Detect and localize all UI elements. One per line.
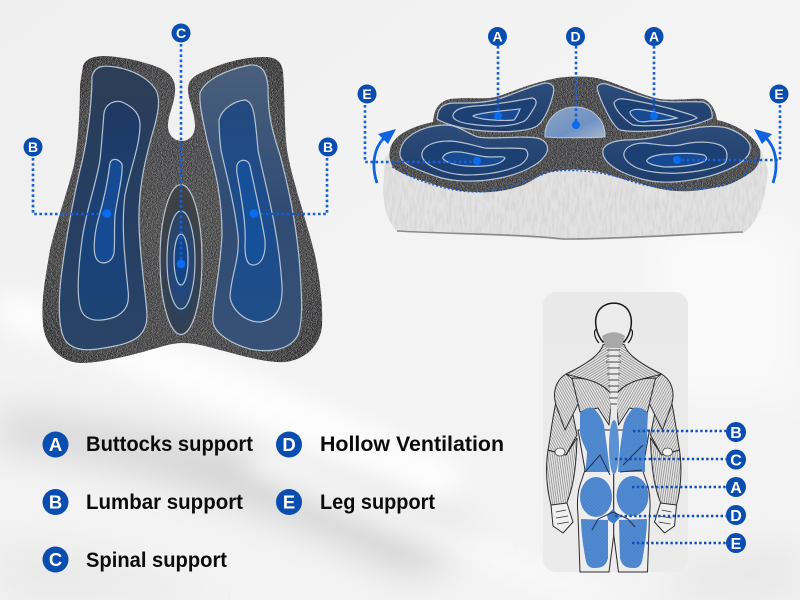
legend: E Leg support: Leg support bbox=[320, 491, 435, 514]
callout B left: B bbox=[28, 139, 38, 155]
cushion body bbox=[42, 56, 322, 363]
blue hollow zone bbox=[607, 509, 620, 524]
legend: B Lumbar support: B bbox=[49, 492, 62, 512]
foam base bbox=[383, 140, 768, 240]
back left pad bbox=[437, 83, 554, 132]
left lumbar pad bbox=[59, 66, 159, 350]
legend: C Spinal support bbox=[42, 546, 227, 572]
figure callout E: E bbox=[731, 536, 742, 553]
callout D: D bbox=[570, 28, 581, 44]
blue leg zones bbox=[581, 519, 647, 568]
callout A right bbox=[644, 27, 664, 120]
legend: B Lumbar support: Lumbar support bbox=[86, 491, 243, 514]
callout B right: B bbox=[323, 139, 333, 155]
callout C on top-down view bbox=[172, 24, 190, 268]
legend: D Hollow Ventilation: D bbox=[282, 434, 296, 455]
figure callout D bbox=[615, 505, 746, 525]
left half of figure bbox=[547, 340, 614, 572]
hollow ventilation dome bbox=[545, 107, 605, 138]
right lumbar pad bbox=[200, 65, 302, 351]
panel backing bbox=[543, 292, 688, 572]
legend: A Buttocks support: Buttocks support bbox=[86, 433, 253, 456]
legend: E Leg support: E bbox=[283, 492, 295, 512]
blue spinal zone bbox=[609, 420, 619, 474]
callout A left: A bbox=[492, 28, 503, 44]
callout A left bbox=[488, 27, 507, 120]
spine ticks bbox=[606, 350, 621, 404]
callout E left bbox=[358, 84, 481, 165]
figure callout C bbox=[615, 450, 746, 470]
dark top shell bbox=[389, 76, 760, 192]
legend: B Lumbar support bbox=[42, 489, 243, 515]
blue lumbar zones bbox=[580, 408, 648, 472]
legend: E Leg support bbox=[276, 489, 435, 515]
callout A right: A bbox=[649, 28, 659, 44]
legend: A Buttocks support bbox=[42, 432, 253, 458]
seat cushion: front view bbox=[383, 76, 768, 240]
curved arrow left bbox=[374, 129, 396, 183]
spine bbox=[609, 340, 619, 420]
head bbox=[596, 303, 631, 342]
figure callout D: D bbox=[730, 508, 742, 525]
legend: C Spinal support: Spinal support bbox=[86, 549, 227, 572]
blue buttocks zones bbox=[580, 476, 648, 517]
figure callout C: C bbox=[730, 452, 742, 469]
legend: A Buttocks support: A bbox=[49, 434, 62, 455]
callout D bbox=[566, 27, 585, 129]
callout E left: E bbox=[362, 86, 372, 102]
right half of figure bbox=[614, 340, 681, 572]
callout B left bbox=[24, 138, 111, 218]
callout E right: E bbox=[774, 86, 784, 102]
front right pad bbox=[603, 126, 750, 182]
figure callout B: B bbox=[730, 425, 742, 442]
blue edge trace bbox=[392, 150, 760, 192]
base edge bbox=[397, 231, 743, 239]
figure callout E bbox=[632, 533, 746, 553]
legend: D Hollow Ventilation: Hollow Ventilation bbox=[320, 433, 504, 456]
figure callout A: A bbox=[730, 480, 742, 497]
figure callout B bbox=[633, 422, 746, 442]
anatomy panel bbox=[543, 292, 688, 572]
front left pad bbox=[400, 125, 548, 181]
seat cushion: top-down view bbox=[42, 56, 322, 363]
curved arrow right bbox=[754, 129, 776, 183]
legend: C Spinal support: C bbox=[49, 549, 62, 570]
figure detail lines over zones bbox=[585, 445, 643, 530]
callout B right bbox=[250, 138, 338, 218]
figure callout A bbox=[632, 477, 746, 497]
callout C on top-down view: C bbox=[176, 25, 186, 41]
back right pad bbox=[597, 84, 712, 131]
ears bbox=[595, 330, 632, 343]
central spinal pad bbox=[160, 184, 202, 334]
human back figure bbox=[547, 303, 681, 572]
callout E right bbox=[673, 84, 788, 164]
neck muscles bbox=[602, 332, 625, 348]
